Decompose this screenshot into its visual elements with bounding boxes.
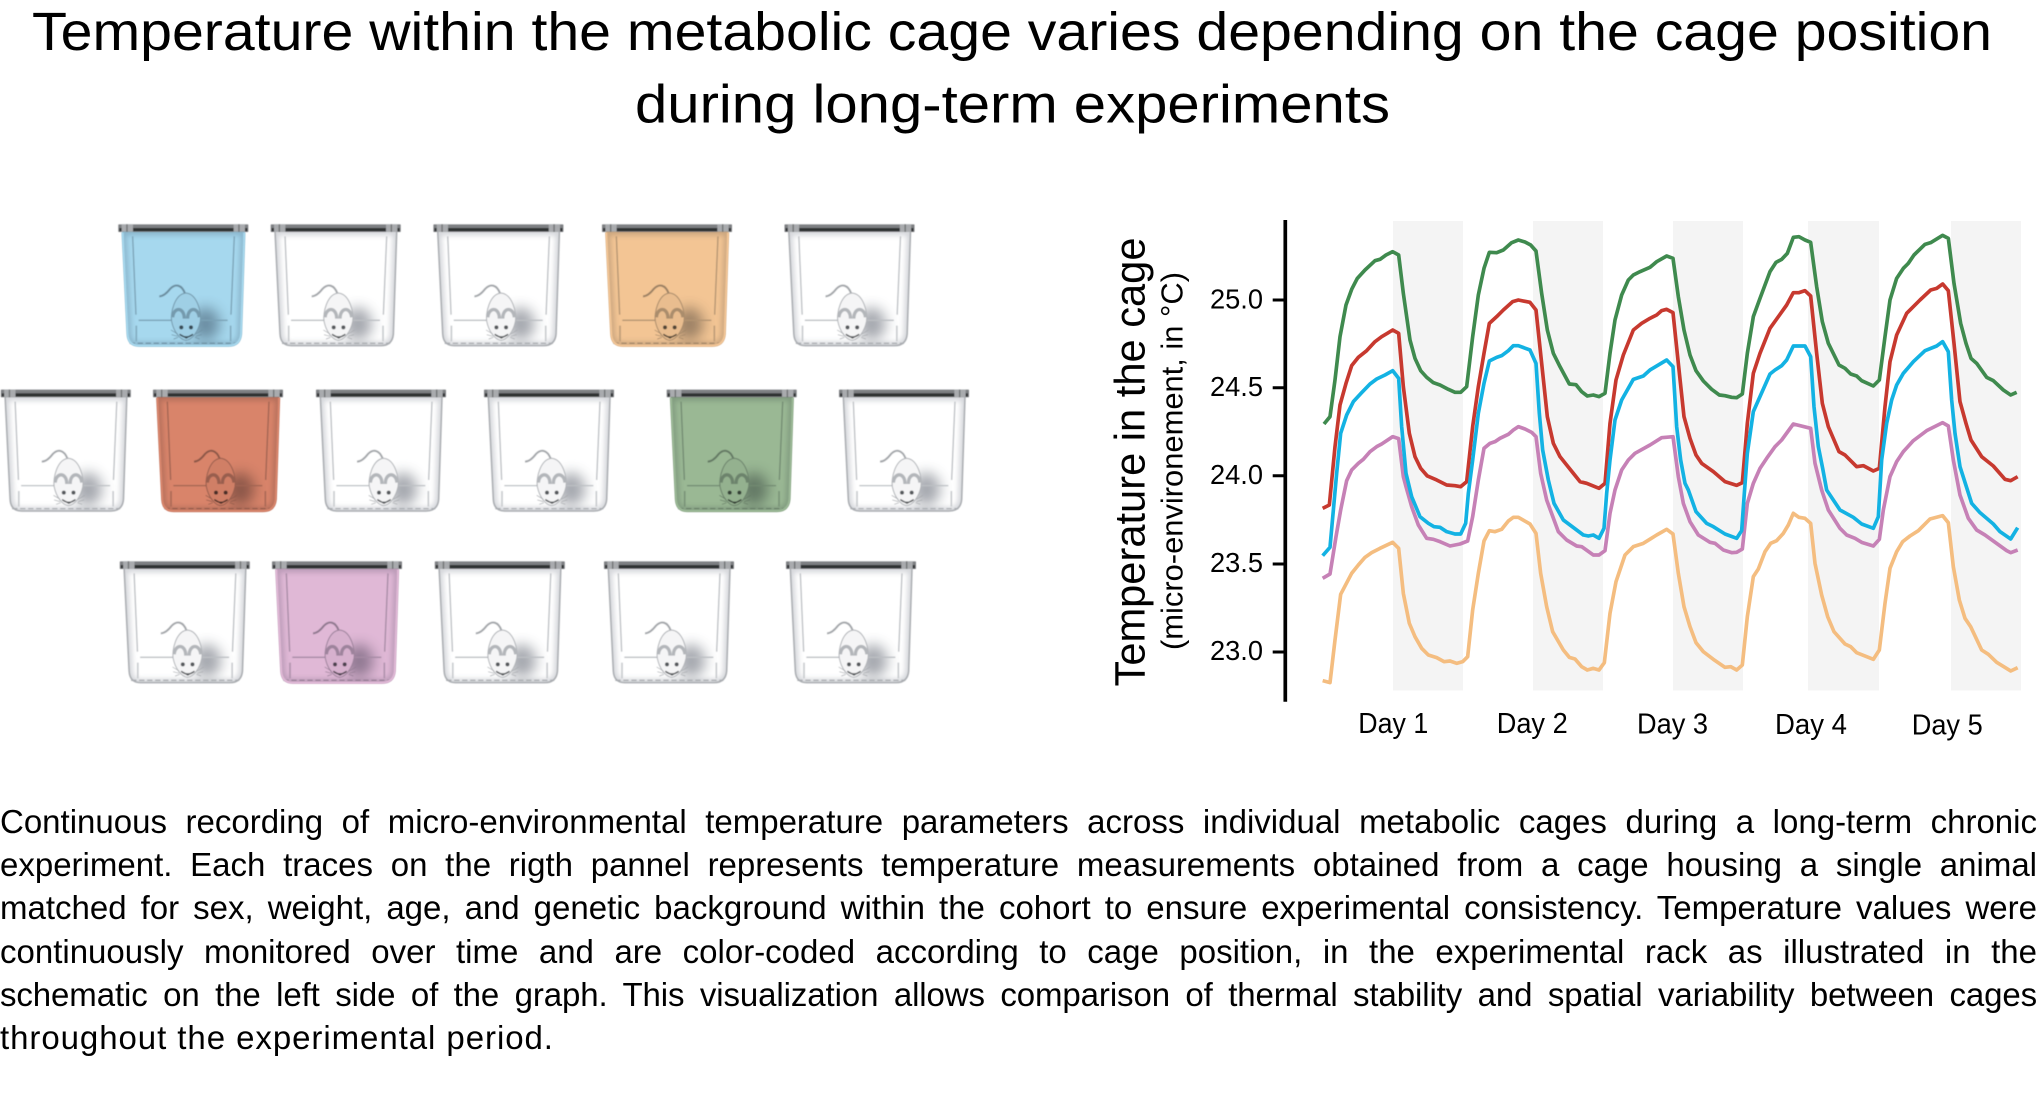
y axis tick labels — [1210, 283, 1263, 666]
cage row 2 position 4 — [484, 390, 614, 511]
cage row 3 position 4 — [604, 561, 734, 683]
description text block: matched for sex, weight, age, and genetic background within the cohort to ensure experimental consistency. Temperature values were — [0, 889, 2037, 926]
y axis tick labels: 24.5 — [1210, 371, 1263, 402]
cage row 1 position 4: orange — [602, 224, 732, 346]
cage row 1 position 3 — [433, 224, 563, 346]
line chart: temperature over five days — [1106, 220, 2021, 742]
title: Temperature within the metabolic cage varies depending on the cage position — [32, 3, 1992, 62]
trace: orange cage — [1323, 513, 2018, 683]
x axis day labels: Day 5 — [1912, 710, 1983, 742]
cage row 2 position 6 — [839, 390, 969, 511]
night shading bands — [1393, 221, 2021, 690]
cage row 3 position 1 — [120, 561, 250, 683]
y axis subtitle: (micro-environement, in °C) — [1155, 272, 1190, 650]
cage row 2 position 1 — [1, 390, 131, 511]
y axis with ticks — [1273, 220, 1285, 702]
cage row 1 position 5 — [784, 224, 914, 346]
trace: blue cage — [1323, 342, 2018, 556]
description text block: schematic on the left side of the graph. This visualization allows comparison of thermal stability and spatial variability between cages — [0, 976, 2037, 1013]
description text block: Continuous recording of micro-environmental temperature parameters across individual metabolic cages during a long-term chronic — [0, 803, 2037, 840]
cage row 2 position 5: green — [667, 390, 797, 511]
cage row 1 position 1: blue — [118, 224, 248, 346]
trace: red cage — [1323, 284, 2018, 508]
trace: green cage — [1324, 235, 2017, 424]
cage row 2 position 3 — [316, 390, 446, 511]
y axis tick labels: 24.0 — [1210, 459, 1263, 490]
description text block: continuously monitored over time and are color-coded according to cage position, in the experimental rack as illustrated in the — [0, 933, 2037, 970]
y axis title: Temperature in the cage — [1106, 238, 1154, 686]
cage row 3 position 5 — [786, 561, 916, 683]
title — [32, 3, 1992, 135]
temperature traces — [1323, 235, 2018, 683]
description text block: throughout the experimental period. — [0, 1019, 554, 1056]
cage row 3 position 3 — [435, 561, 565, 683]
x axis day labels: Day 1 — [1358, 708, 1428, 740]
y axis tick labels: 23.0 — [1210, 635, 1263, 666]
x axis day labels — [1358, 708, 1983, 742]
description text block — [0, 803, 2037, 1056]
cage row 3 position 2: pink — [272, 561, 402, 683]
x axis day labels: Day 4 — [1775, 709, 1847, 741]
trace: pink cage — [1323, 423, 2018, 578]
cage row 1 position 2 — [271, 224, 401, 346]
description text block: experiment. Each traces on the rigth pannel represents temperature measurements obtained from a cage housing a single animal — [0, 846, 2037, 883]
y axis tick labels: 25.0 — [1210, 283, 1263, 314]
cage row 2 position 2: red — [153, 390, 283, 511]
y axis tick labels: 23.5 — [1210, 547, 1263, 578]
x axis day labels: Day 2 — [1497, 708, 1568, 740]
x axis day labels: Day 3 — [1637, 708, 1708, 740]
title: during long-term experiments — [635, 76, 1390, 135]
panel: cage rack schematic — [1, 224, 969, 683]
